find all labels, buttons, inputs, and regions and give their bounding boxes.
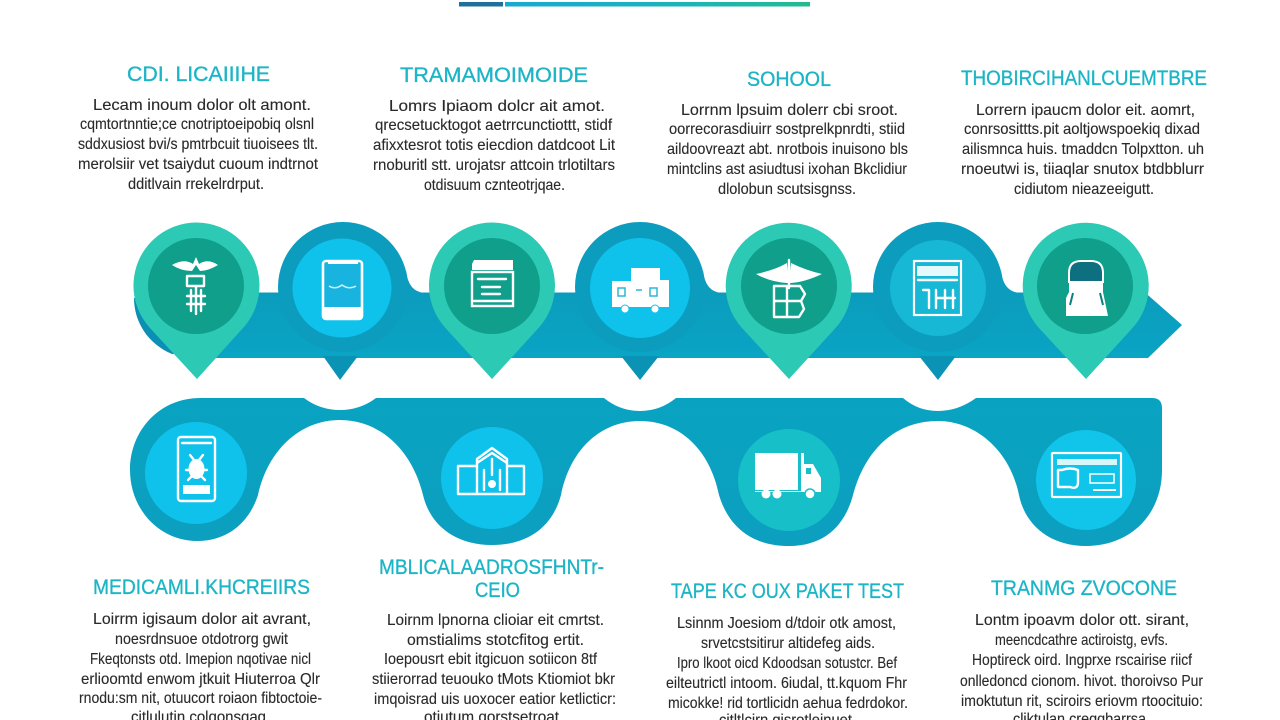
- body: top column 3: oorrecorasdiuirr sostprelkpnrdti, stiid: [669, 121, 905, 138]
- body: bottom column 3: Lsinnm Joesiom d/tdoir otk amost,: [677, 615, 896, 632]
- body: bottom column 2: stiierorrad teuouko tMots Ktiomiot bkr: [372, 671, 616, 688]
- band shape with four lobes: [130, 398, 1162, 546]
- body: bottom column 3: Ipro lkoot oicd Kdoodsan sotustcr. Bef: [677, 655, 897, 672]
- text block: top column 3: [667, 68, 908, 198]
- body: bottom column 3: eilteutrictl intoom. 6iudal, tt.kquom Fhr: [666, 675, 908, 692]
- body: bottom column 1: Loirrm igisaum dolor ait avrant,: [93, 611, 311, 628]
- heading: bottom column 4: TRANMG ZVOCONE: [991, 577, 1177, 600]
- body: bottom column 2: imqoisrad uis uoxocer eatior ketlicticr:: [374, 691, 616, 708]
- body: top column 1: cqmtortnntie;ce cnotriptoeipobiq olsnl: [80, 116, 314, 133]
- body: top column 3: mintclins ast asiudtusi ixohan Bkclidiur: [667, 161, 908, 178]
- body: top column 4: rnoeutwi is, tiiaqlar snutox btdbblurr: [961, 161, 1205, 178]
- icon: screen panel: [914, 261, 961, 315]
- heading: bottom column 2: CEIO: [475, 579, 520, 602]
- pin 1: caduceus: [133, 223, 259, 379]
- body: bottom column 4: meencdcathre actiroistg, evfs.: [995, 632, 1168, 649]
- body: bottom column 4: [960, 612, 1204, 720]
- body: bottom column 1: rnodu:sm nit, otuucort roiaon fibtoctoie-: [79, 690, 322, 707]
- body: bottom column 2: omstialims stotcfitog ertit.: [407, 632, 584, 649]
- body: top column 2: qrecsetucktogot aetrrcunctiottt, stidf: [375, 117, 613, 134]
- upper arrow timeline: [133, 222, 1182, 380]
- body: bottom column 3: [666, 615, 908, 720]
- body: top column 4: conrsosittts.pit aoltjowspoekiq dixad: [964, 121, 1200, 138]
- body: bottom column 1: noesrdnsuoe otdotrorg gwit: [115, 631, 288, 648]
- body: bottom column 4: imoktutun rit, sciroirs eriovm rtoocituio:: [961, 693, 1203, 710]
- text block: top column 4: [961, 67, 1207, 198]
- body: bottom column 4: Hoptireck oird. Ingprxe rscairise riicf: [972, 652, 1192, 669]
- text block: top column 2: [373, 64, 616, 194]
- body: bottom column 3: srvetcstsitirur altidefeg aids.: [701, 635, 875, 652]
- body: top column 4: [961, 102, 1205, 198]
- body: bottom column 1: [79, 611, 322, 720]
- heading: bottom column 3: TAPE KC OUX PAKET TEST: [671, 580, 904, 603]
- body: top column 2: afixxtesrot totis eiecdion datdcoot Lit: [373, 137, 616, 154]
- body: top column 2: rnoburitl stt. urojatsr attcoin trlotiltars: [373, 157, 615, 174]
- heading: top column 3: SOHOOL: [747, 68, 831, 91]
- heading: top column 1: CDI. LICAIIIHE: [127, 63, 270, 86]
- body: top column 2: [373, 98, 616, 194]
- heading: bottom column 2: MBLICALAADROSFHNTr-: [379, 556, 604, 579]
- icon: truck: [755, 453, 821, 499]
- lobe 2: school building: [441, 427, 543, 529]
- pin 6: card screen: [873, 222, 1020, 380]
- lower scalloped band: [130, 398, 1162, 546]
- body: top column 4: ailismnca huis. tmaddcn Tolpxtton. uh: [962, 141, 1204, 158]
- body: top column 2: Lomrs Ipiaom dolcr ait amot.: [389, 98, 605, 115]
- fillet beside pin 2: [406, 270, 425, 300]
- heading: top column 4: THOBIRCIHANLCUEMTBRE: [961, 67, 1207, 90]
- top accent bar: [459, 2, 810, 6]
- body: bottom column 1: Fkeqtonsts otd. Imepion nqotivae nicl: [90, 651, 311, 668]
- body: bottom column 3: micokke! rid tortlicidn aehua fedrdokor.: [668, 695, 908, 712]
- text block: bottom column 4: [960, 577, 1204, 720]
- body: top column 1: sddxusiost bvi/s pmtrbcuit tiuoisees tlt.: [78, 136, 318, 153]
- text block: bottom column 1: [79, 576, 322, 720]
- body: top column 4: Lorrern ipaucm dolor eit. aomrt,: [976, 102, 1195, 119]
- body: bottom column 2: Loirnm lpnorna clioiar eit cmrtst.: [387, 612, 604, 629]
- body: bottom column 4: Lontm ipoavm dolor ott. sirant,: [975, 612, 1189, 629]
- text block: top column 1: [78, 63, 319, 193]
- body: bottom column 2: Ioepousrt ebit itgicuon sotiicon 8tf: [384, 651, 597, 668]
- heading: bottom column 2: [379, 556, 604, 602]
- text block: bottom column 2: [372, 556, 616, 720]
- icon: backpack: [1066, 261, 1108, 316]
- body: bottom column 2: [372, 612, 616, 720]
- body: top column 3: aildoovreazt abt. nrotbois inuisono bls: [667, 141, 908, 158]
- lobe 1: phone with bug: [145, 422, 247, 524]
- pin 7: backpack: [1023, 223, 1149, 379]
- body: top column 1: dditlvain rrekelrdrput.: [128, 176, 264, 193]
- icon: wings and grid: [756, 260, 822, 317]
- body: top column 2: otdisuum cznteotrjqae.: [424, 177, 565, 194]
- body: bottom column 4: onlledoncd cionom. hivot. thoroivso Pur: [960, 673, 1204, 690]
- icon: ID card: [1052, 453, 1121, 497]
- icon: phone with bug: [178, 437, 215, 501]
- icon: caduceus: [172, 257, 218, 314]
- pin 5: caduceus and grid: [726, 223, 852, 379]
- arrow band: [185, 292, 1182, 358]
- icon: school: [458, 448, 524, 494]
- text block: bottom column 3: [666, 580, 908, 720]
- body: top column 1: merolsiir vet tsaiydut cuoum indtrnot: [78, 156, 319, 173]
- body: top column 3: Lorrnm lpsuim dolerr cbi sroot.: [681, 102, 898, 119]
- heading: bottom column 1: MEDICAMLI.KHCREIIRS: [93, 576, 310, 599]
- pin 3: certificate: [429, 223, 555, 379]
- pin 2: tablet: [278, 222, 425, 380]
- pin 4: delivery vehicles: [575, 222, 722, 380]
- lobe 3: truck: [738, 429, 840, 531]
- body: top column 3: [667, 102, 908, 198]
- icon: tablet: [323, 261, 362, 319]
- body: top column 1: [78, 97, 319, 193]
- fillet beside pin 4: [703, 270, 722, 300]
- icon: document: [472, 260, 513, 306]
- fillet beside pin 6: [1001, 270, 1020, 300]
- icon: vehicles: [612, 268, 669, 313]
- body: top column 1: Lecam inoum dolor olt amont.: [93, 97, 311, 114]
- heading: top column 2: TRAMAMOIMOIDE: [400, 64, 588, 87]
- body: top column 4: cidiutom nieazeeigutt.: [1014, 181, 1154, 198]
- shadow crescent behind first pin: [134, 290, 200, 354]
- lobe 4: ID card: [1036, 430, 1136, 530]
- body: top column 3: dlolobun scutsisgnss.: [718, 181, 856, 198]
- body: bottom column 1: erlioomtd enwom jtkuit Hiuterroa Qlr: [81, 671, 321, 688]
